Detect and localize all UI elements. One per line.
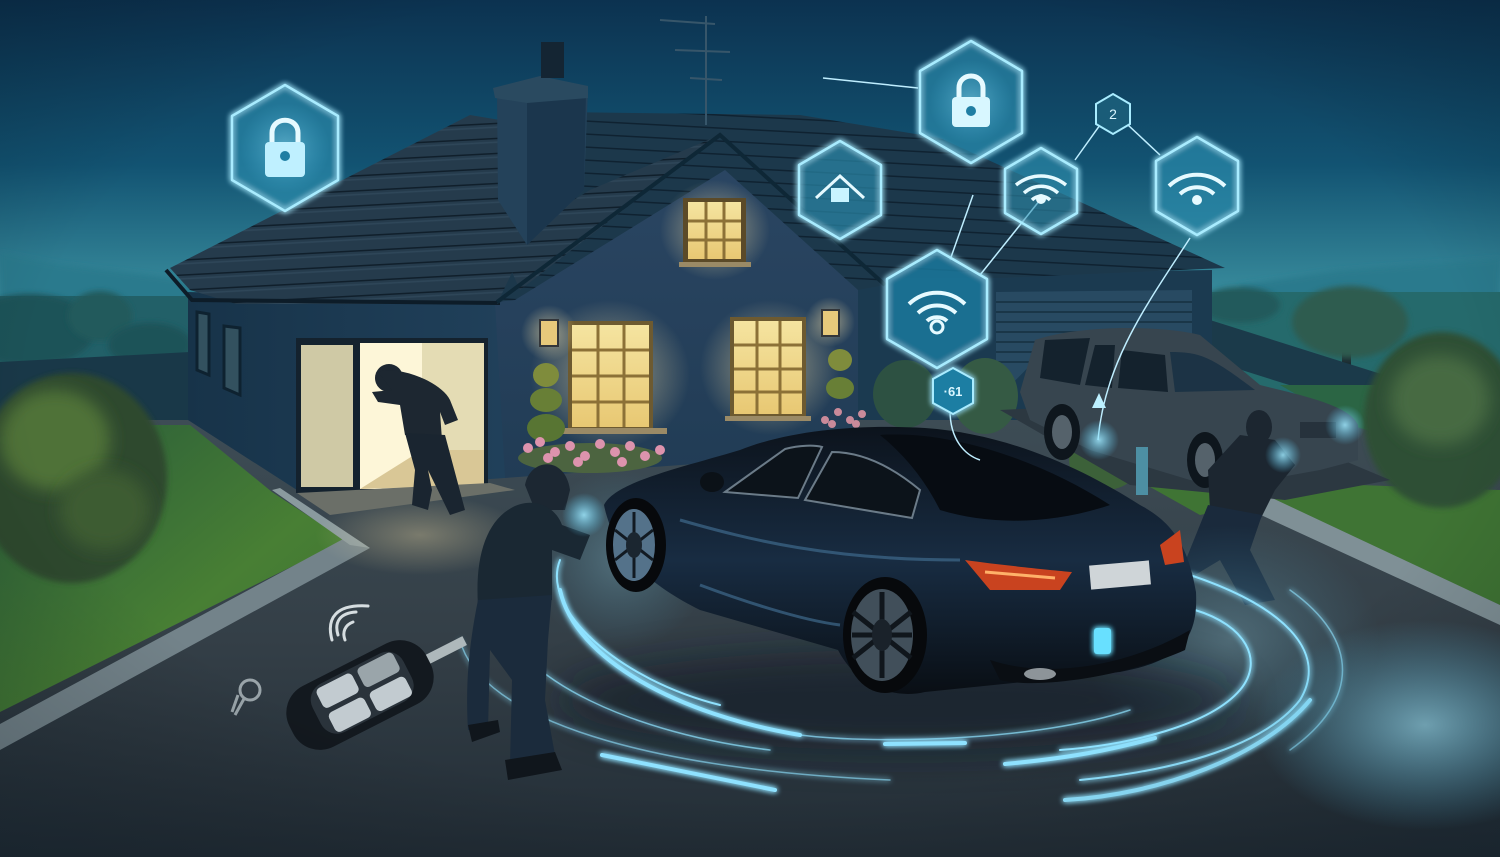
relay nodes [1079,393,1148,495]
house front wall [495,150,858,478]
main car [604,427,1196,694]
icon: number hexagon: 2 [1109,106,1117,122]
small keys [232,680,260,715]
roof valley [497,225,570,304]
suv driveway [1000,400,1390,500]
blue relay device [1094,628,1111,654]
icon: number hexagon [1096,94,1130,134]
side windows [197,312,240,395]
icon: wifi hexagon centre [1005,148,1077,234]
exhaust [1024,668,1056,680]
background trees [0,286,1408,380]
left lawn [0,425,370,750]
icon: left padlock hexagon [232,85,338,211]
left roof [166,115,530,304]
ground glow [530,470,1380,755]
gable roof [497,135,885,302]
thief at door [372,364,465,515]
house side wall [188,292,505,492]
icon: wifi hexagon large [887,250,987,368]
rear wheel [843,577,927,693]
license plate [1089,560,1151,590]
flower beds [518,349,862,473]
right lawn [1120,385,1500,625]
thief with relay device [467,464,606,780]
sliding glass door [296,338,515,515]
icon: code hexagon: ·61 [944,384,962,399]
suv [1020,328,1365,488]
bright ground glow [1255,620,1500,830]
key blade [420,636,467,667]
upper window [660,180,770,280]
car windows [725,446,920,518]
chimney [493,42,588,245]
key fob [276,611,481,760]
side mirror [700,472,724,492]
fences [0,320,1400,440]
connection lines [823,78,1190,460]
wall lamps [521,297,855,361]
icon: home hexagon [799,141,881,239]
icon: code hexagon [933,368,973,414]
bushes by garage [873,358,1141,490]
wireless arcs [330,606,368,640]
lower right window [700,300,840,435]
signal rings [460,560,1342,800]
distant landscape [0,252,1500,426]
door light spill [315,495,525,575]
icon: top padlock hexagon [920,41,1022,163]
garage [850,270,1212,420]
ground and driveway [0,420,1500,857]
front wheel [606,498,666,592]
back roof [560,112,1225,278]
lower left window [530,300,690,450]
left shrub [0,373,167,583]
antenna [660,16,730,125]
rear diffuser [990,630,1190,683]
body highlights [680,520,960,625]
rear window [880,434,1110,521]
right shrub [1364,332,1500,508]
thief by suv [1185,410,1301,605]
icon: wifi hexagon right [1156,137,1238,235]
